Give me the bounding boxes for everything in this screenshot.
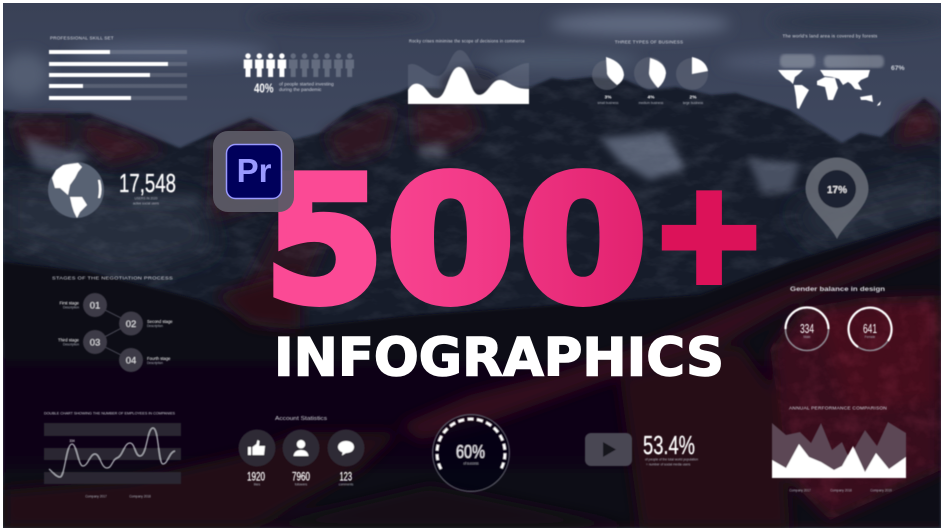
panel: negotiation stages: 04 xyxy=(126,356,136,366)
rock texture on the mountains xyxy=(3,80,941,340)
panel: negotiation stages: Description xyxy=(147,361,163,365)
panel: annual performance area chart xyxy=(772,406,906,492)
icon: row of ten people xyxy=(244,53,354,77)
icon: globe xyxy=(48,162,104,218)
icon: thumbs up xyxy=(248,440,265,455)
panel: negotiation stages xyxy=(52,276,173,372)
panel: three types of business pies: medium business xyxy=(639,101,664,105)
panel: negotiation stages: Description xyxy=(63,306,79,310)
panel: negotiation stages: Fourth stage xyxy=(147,356,171,361)
panel: annual performance area chart: Company 2017 xyxy=(789,488,811,492)
panel: account statistics: 1920 xyxy=(247,472,265,484)
panel: negotiation stages: First stage xyxy=(59,300,80,306)
headline: 500+: 00 xyxy=(386,141,647,342)
headline: 500+: + xyxy=(652,155,766,312)
panel: three types of business pies: small business xyxy=(598,101,619,105)
icon: world map xyxy=(778,70,881,109)
icon: Adobe Premiere Pro xyxy=(213,131,294,212)
panel: 60% gauge: 60% xyxy=(456,442,485,462)
icon: user xyxy=(294,440,308,456)
panel: gender balance rings: 641 xyxy=(863,322,877,336)
panel: people pictogram 40% xyxy=(244,53,354,96)
panel: negotiation stages: STAGES OF THE NEGOTIATION PROCESS xyxy=(52,276,173,280)
panel: video stat 53.4%: = number of social media users xyxy=(646,462,691,466)
icon: speech bubble xyxy=(338,441,354,456)
headline: 500+: 5 xyxy=(264,140,384,342)
panel: gender balance rings: 334 xyxy=(800,322,814,336)
panel: negotiation stages: Second stage xyxy=(147,319,173,324)
panel: line chart employees: DOUBLE CHART SHOWING THE NUMBER OF EMPLOYEES IN COMPANIES xyxy=(44,412,175,416)
panel: gender balance rings: Gender balance in design xyxy=(790,286,885,293)
panel: negotiation stages: 02 xyxy=(126,319,136,330)
panel: annual performance area chart: Company 2019 xyxy=(870,488,892,492)
icon: video play button xyxy=(585,433,632,466)
panel: annual performance area chart: Company 2018 xyxy=(830,488,852,492)
panel: video stat 53.4% xyxy=(585,430,698,466)
red rock texture on the hill xyxy=(770,290,941,525)
panel: 60% gauge xyxy=(432,414,510,492)
panel: globe statistic 17,548: USERS IN 2020 xyxy=(134,196,158,200)
icon: map pin 17%: 17% xyxy=(827,185,847,196)
panel: account statistics: 7960 xyxy=(292,472,310,484)
panel: negotiation stages: Description xyxy=(63,342,79,346)
panel: video stat 53.4%: 53.4% xyxy=(643,430,695,460)
panel: line chart employees: Company 2017 xyxy=(85,494,107,498)
panel: video stat 53.4%: of people of the total world population xyxy=(645,458,698,462)
panel: account statistics: comments xyxy=(339,482,354,486)
panel: gender balance rings: Female xyxy=(865,335,876,339)
panel: line chart employees xyxy=(44,412,181,498)
panel: professional skill set bars: PROFESSIONAL SKILL SET xyxy=(50,36,114,40)
panel: world map forest cover: The world's land area is covered by forests xyxy=(782,34,878,38)
panel: gender balance rings: Male xyxy=(804,335,811,339)
panel: globe statistic 17,548 xyxy=(48,162,176,218)
panel: account statistics xyxy=(238,416,364,486)
headline: 500+ xyxy=(264,140,766,342)
panel: area chart top: Rocky crises minimise the scope of decisions in commerce xyxy=(409,38,525,44)
panel: people pictogram 40%: during the pandemic xyxy=(279,87,322,92)
panel: gender balance rings xyxy=(786,286,892,350)
panel: account statistics: Account Statistics xyxy=(275,416,327,422)
panel: three types of business pies xyxy=(592,40,708,105)
panel: 60% gauge: of success xyxy=(463,462,479,466)
panel: account statistics: likes xyxy=(254,482,261,486)
panel: negotiation stages: Description xyxy=(147,324,163,328)
panel: people pictogram 40%: of people started investing xyxy=(279,82,334,86)
panel: professional skill set bars xyxy=(49,36,187,100)
panel: negotiation stages: Third stage xyxy=(58,338,80,342)
panel: account statistics: 123 xyxy=(340,472,352,484)
panel: globe statistic 17,548: 17,548 xyxy=(119,168,176,198)
panel: negotiation stages: 01 xyxy=(90,300,100,312)
panel: globe statistic 17,548: active social users xyxy=(133,202,159,206)
panel: area chart top xyxy=(408,38,529,104)
icon: Adobe Premiere Pro: Pr xyxy=(237,152,272,189)
panel: line chart employees: Company 2018 xyxy=(129,494,151,498)
panel: annual performance area chart: ANNUAL PERFORMANCE COMPARISON xyxy=(789,406,887,410)
panel: line chart employees: 334 xyxy=(69,439,75,443)
panel: world map forest cover xyxy=(778,34,905,109)
panel: world map forest cover: 67% xyxy=(891,65,905,72)
headline: INFOGRAPHICS: INFOGRAPHICS xyxy=(274,328,724,388)
panel: account statistics: followers xyxy=(295,482,308,486)
icon: map pin 17% xyxy=(806,158,868,239)
panel: three types of business pies: large business xyxy=(683,101,704,105)
panel: people pictogram 40%: 40% xyxy=(254,82,274,96)
panel: three types of business pies: 4% xyxy=(648,94,655,100)
panel: three types of business pies: 2% xyxy=(690,94,697,100)
panel: negotiation stages: 03 xyxy=(90,338,100,348)
panel: three types of business pies: THREE TYPES OF BUSINESS xyxy=(615,40,683,44)
panel: three types of business pies: 3% xyxy=(605,94,612,100)
